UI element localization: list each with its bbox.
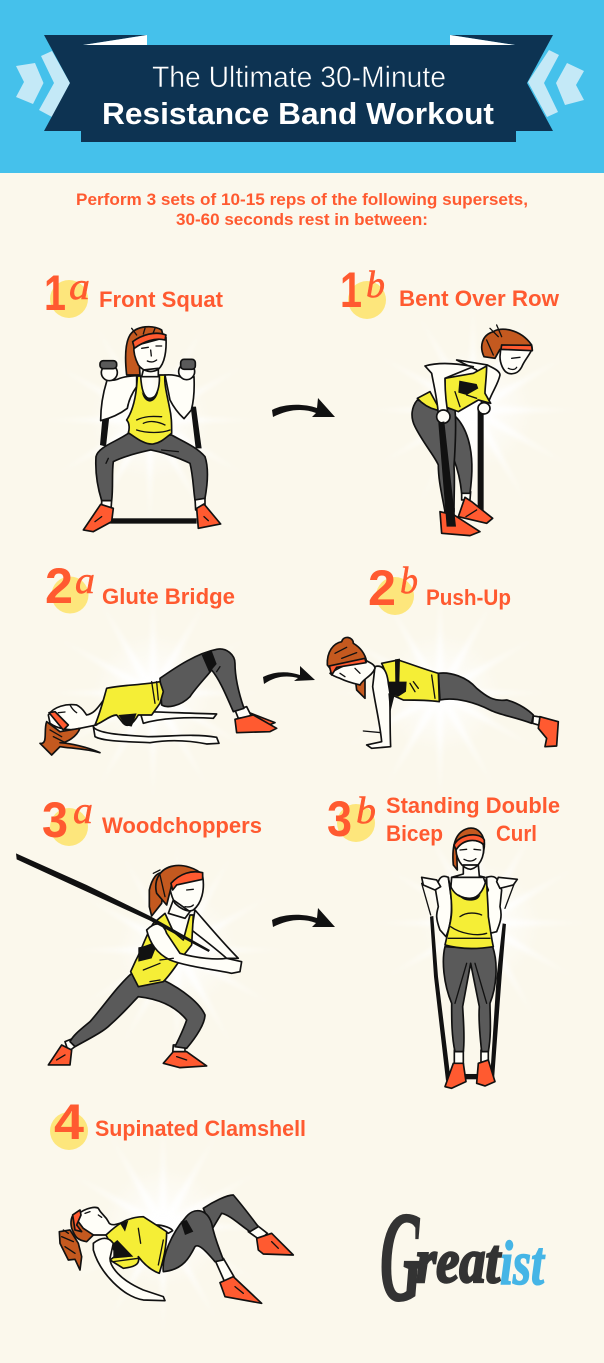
badge 2a: a xyxy=(75,560,95,602)
figure standing double bicep curl xyxy=(422,828,517,1088)
badge 2b: b xyxy=(400,560,418,602)
panel: 2b push-up xyxy=(327,560,558,748)
heading front squat: Front Squat xyxy=(99,287,224,312)
panel: 1a front squat xyxy=(44,265,224,532)
panel: 3b standing double bicep curl xyxy=(327,790,560,1088)
ribbon banner xyxy=(44,35,553,142)
figure bent over row xyxy=(412,325,532,536)
logo: Greatist: ist xyxy=(500,1230,545,1298)
header band xyxy=(0,0,604,173)
title line 1: The Ultimate 30-Minute xyxy=(152,61,446,94)
badge 1b xyxy=(340,262,386,319)
heading supinated clamshell: Supinated Clamshell xyxy=(95,1116,306,1141)
heading standing double: Standing Double xyxy=(386,793,560,818)
figure woodchoppers xyxy=(16,853,242,1068)
title line 2: Resistance Band Workout xyxy=(102,96,494,131)
figure supinated clamshell xyxy=(59,1195,293,1303)
figure push-up xyxy=(327,637,558,748)
chevrons left xyxy=(16,51,70,117)
heading bent over row: Bent Over Row xyxy=(399,286,560,311)
arrow 2a to 2b xyxy=(263,666,315,684)
badge 4: 4 xyxy=(54,1094,84,1150)
figure glute bridge xyxy=(40,649,277,755)
panel: 2a glute bridge xyxy=(40,558,277,755)
arrow 3a to 3b xyxy=(272,908,335,927)
heading curl: Curl xyxy=(496,821,537,846)
badge 3a xyxy=(42,790,93,848)
chevrons right xyxy=(528,50,584,117)
badge 1a: 1 xyxy=(44,265,66,321)
intro text: 30-60 seconds rest in between: xyxy=(176,210,428,229)
panel: 4 supinated clamshell xyxy=(50,1094,306,1303)
badge 3b xyxy=(327,790,376,847)
heading push-up: Push-Up xyxy=(426,585,511,610)
logo: Greatist xyxy=(380,1186,545,1328)
badge 1a: a xyxy=(69,266,90,308)
heading woodchoppers: Woodchoppers xyxy=(102,813,262,838)
badge 3b: 3 xyxy=(327,791,352,847)
panel: 1b bent over row xyxy=(340,262,560,536)
badge 2a: 2 xyxy=(45,558,73,614)
intro text xyxy=(76,190,528,229)
badge 3a: a xyxy=(73,790,93,832)
panel: 3a woodchoppers xyxy=(16,790,262,1068)
badge 1b: b xyxy=(366,264,385,306)
heading bicep: Bicep xyxy=(386,821,443,846)
badge 2b: 2 xyxy=(368,560,396,616)
intro text: Perform 3 sets of 10-15 reps of the following supersets, xyxy=(76,190,528,209)
logo: Greatist: G xyxy=(380,1186,422,1328)
badge 1b: 1 xyxy=(340,262,362,318)
badge 3a: 3 xyxy=(42,792,68,848)
heading glute bridge: Glute Bridge xyxy=(102,584,235,609)
logo: Greatist: reat xyxy=(416,1228,501,1296)
badge 3b: b xyxy=(356,790,376,832)
figure front squat xyxy=(83,327,221,532)
arrow 1a to 1b xyxy=(272,398,335,417)
badge 1a xyxy=(44,265,90,321)
badge 2a xyxy=(45,558,95,614)
badge 2b xyxy=(368,560,418,616)
